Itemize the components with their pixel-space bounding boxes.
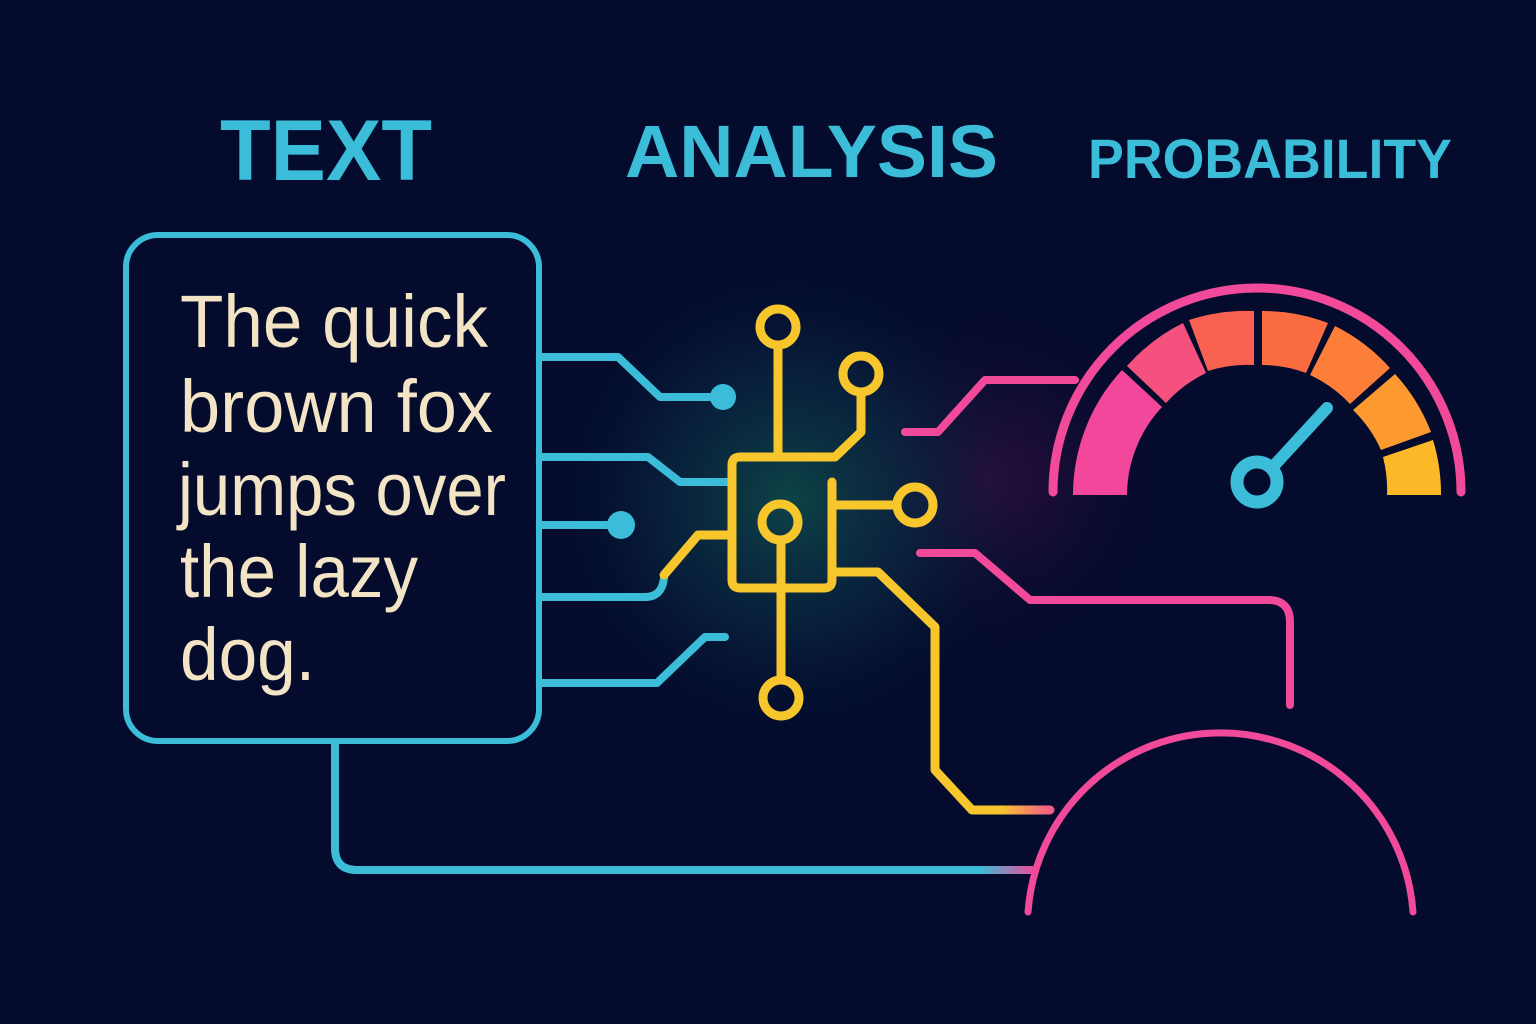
text block: sample sentence: the lazy [180,530,418,613]
text block: sample sentence: dog. [180,613,315,696]
panel: text box [126,235,539,741]
icon: needle [1237,408,1327,502]
text block: sample sentence [176,280,506,696]
heading: TEXT: TEXT [220,103,432,199]
cyan input traces [335,357,1032,870]
text block: sample sentence: jumps over [176,448,506,531]
icon: processor chip [664,309,1050,810]
pink output traces [905,380,1290,705]
text block: sample sentence: brown fox [180,365,493,448]
gauge: probability meter [1053,288,1461,502]
heading: PROBABILITY: PROBABILITY [1088,127,1452,190]
icon: pink half circle [1028,733,1413,912]
text block: sample sentence: The quick [180,280,489,363]
heading: ANALYSIS: ANALYSIS [625,110,998,193]
